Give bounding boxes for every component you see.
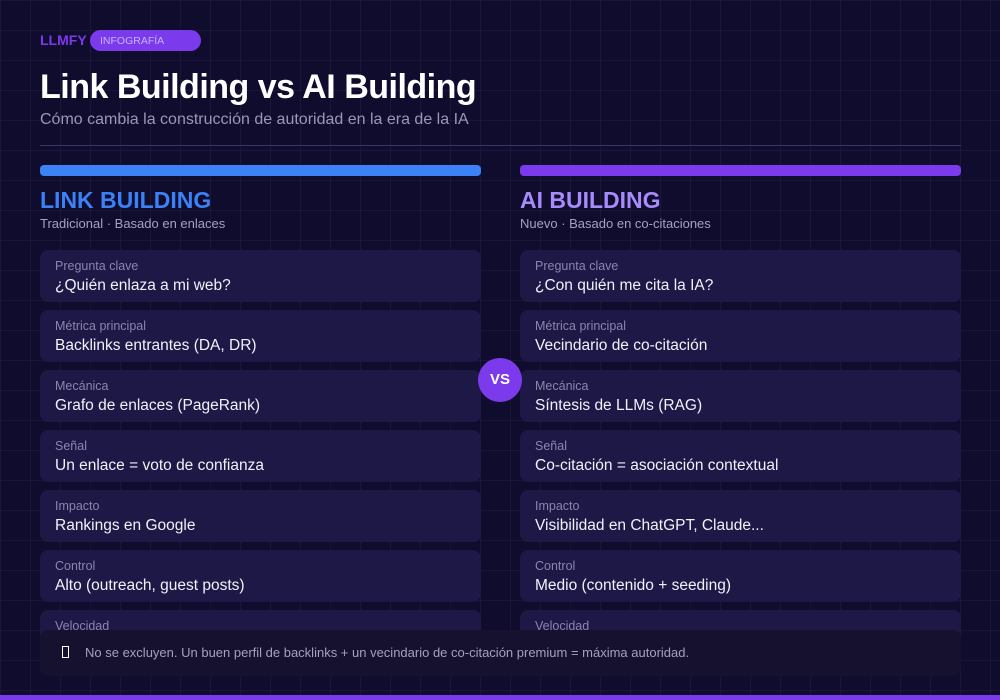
text: Backlinks entrantes (DA, DR) <box>55 337 257 354</box>
text: Impacto <box>535 499 579 513</box>
text: Vecindario de co-citación <box>535 337 707 354</box>
vs badge: VS <box>490 371 510 388</box>
footer note: No se excluyen. Un buen perfil de backlinks + un vecindario de co-citación premium = máxima autoridad. <box>85 645 689 660</box>
icon <box>62 646 69 658</box>
text: Control <box>55 559 95 573</box>
accent bar <box>520 165 961 176</box>
text: Impacto <box>55 499 99 513</box>
text: Visibilidad en ChatGPT, Claude... <box>535 517 764 534</box>
panel: link building: Tradicional · Basado en enlaces <box>40 216 225 231</box>
text: Alto (outreach, guest posts) <box>55 577 245 594</box>
text: Velocidad <box>535 619 589 633</box>
footer note <box>40 630 961 676</box>
row cards left: Pregunta clave <box>55 259 138 273</box>
text: Métrica principal <box>535 319 626 333</box>
heading: LINK BUILDING <box>40 187 211 213</box>
text: Velocidad <box>55 619 109 633</box>
text: Co-citación = asociación contextual <box>535 457 778 474</box>
text: Grafo de enlaces (PageRank) <box>55 397 260 414</box>
row cards left <box>40 250 481 302</box>
brand <box>40 30 201 51</box>
brand: LLMFY <box>40 32 87 48</box>
heading: AI BUILDING <box>520 187 661 213</box>
badge <box>90 30 201 51</box>
badge: INFOGRAFÍA <box>100 35 164 47</box>
text: Control <box>535 559 575 573</box>
panel: link building <box>40 165 481 231</box>
text: Mecánica <box>55 379 108 393</box>
subtitle: Cómo cambia la construcción de autoridad en la era de la IA <box>40 111 469 128</box>
text: Señal <box>55 439 87 453</box>
text: Señal <box>535 439 567 453</box>
panel: ai building: Nuevo · Basado en co-citaciones <box>520 216 711 231</box>
vs badge <box>478 358 522 402</box>
text: Síntesis de LLMs (RAG) <box>535 397 702 414</box>
row cards right: Pregunta clave <box>535 259 618 273</box>
panel: ai building <box>520 165 961 231</box>
row cards right <box>520 250 961 302</box>
accent bar <box>40 165 481 176</box>
row cards left: ¿Quién enlaza a mi web? <box>55 277 231 294</box>
text: Un enlace = voto de confianza <box>55 457 264 474</box>
text: Mecánica <box>535 379 588 393</box>
text: Métrica principal <box>55 319 146 333</box>
title: Link Building vs AI Building <box>40 68 476 106</box>
row cards right: ¿Con quién me cita la IA? <box>535 277 713 294</box>
text: Medio (contenido + seeding) <box>535 577 731 594</box>
text: Rankings en Google <box>55 517 195 534</box>
